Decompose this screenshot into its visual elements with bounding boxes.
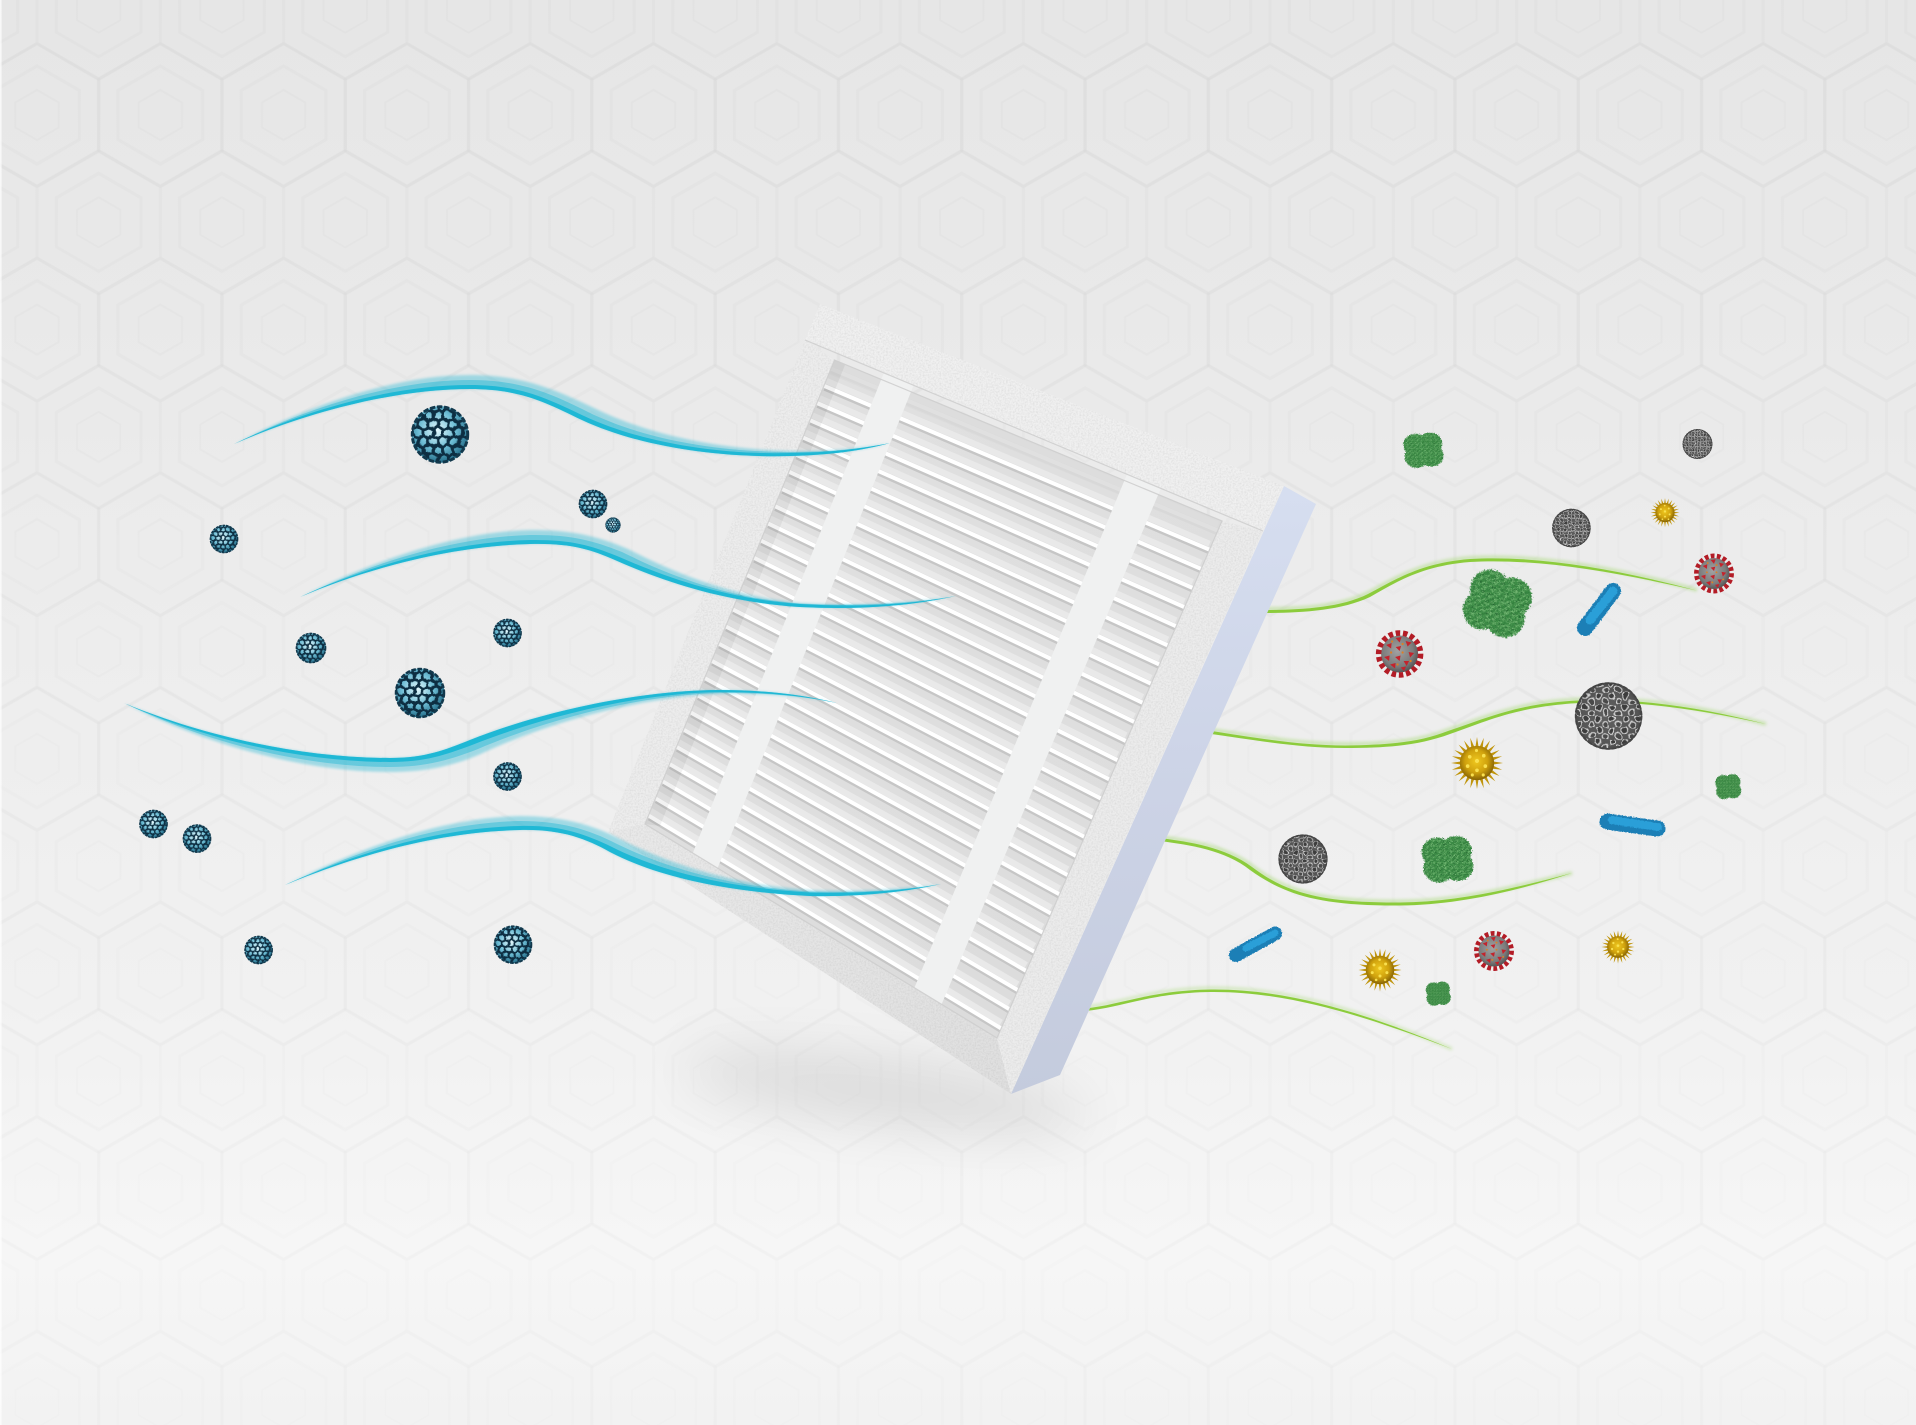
mold clump 1 (1403, 433, 1444, 468)
mold clump 2 large (1455, 561, 1540, 646)
air filter (600, 304, 1316, 1094)
frame bottom strip (608, 824, 1011, 1094)
molecule 1 large (412, 406, 468, 463)
dust ball 4 (1279, 835, 1327, 883)
blue stream 1 (234, 375, 890, 456)
bacterium rod 2 (1608, 820, 1658, 829)
mold clump 4 (1422, 836, 1473, 882)
virus 2 (1379, 633, 1421, 675)
support rib left (690, 370, 915, 872)
mold clump 5 small (1426, 982, 1451, 1006)
filter side edge (1011, 486, 1316, 1094)
virus 1 (1696, 556, 1732, 591)
contaminants (right) (1236, 429, 1741, 1006)
molecule 12 (494, 926, 532, 963)
pollen 2 (1451, 737, 1503, 789)
bacterium rod 1 (1585, 591, 1613, 628)
blue stream 3 (124, 690, 837, 772)
molecule 5 (296, 633, 326, 663)
pollen 3 (1601, 930, 1635, 964)
molecule 3 tiny (606, 518, 620, 532)
blue stream 2 (300, 530, 956, 608)
dust ball 3 large (1575, 682, 1642, 750)
molecule 11 (245, 936, 273, 964)
frame top strip (805, 304, 1284, 531)
mold clump 3 small (1715, 774, 1741, 799)
foam frame (608, 304, 1284, 1094)
frame left strip (608, 340, 834, 832)
molecule 8 (494, 763, 521, 790)
frame right strip (997, 521, 1263, 1094)
dust ball 2 (1552, 509, 1591, 547)
molecule 9 (140, 810, 167, 838)
molecule 2 (579, 490, 607, 518)
green stream 3 (1160, 837, 1572, 906)
bacterium rod 3 (1236, 933, 1275, 955)
dirty-side airflow: blue streams entering filter (124, 375, 956, 896)
virus 3 (1476, 933, 1512, 969)
floor shadow under filter (678, 1037, 1092, 1147)
pollen 4 (1358, 948, 1402, 992)
dust ball 1 (1683, 429, 1712, 459)
clean-side airflow: green streams leaving filter (1085, 557, 1766, 1049)
green stream 4 (1085, 988, 1452, 1049)
molecule 7 large (396, 669, 444, 717)
molecule 4 (210, 525, 238, 553)
frame seams (645, 340, 1263, 1038)
support rib right (911, 467, 1164, 1008)
pollen 1 (1650, 498, 1680, 527)
blue stream 4 (285, 816, 941, 896)
pleated filter media (646, 361, 1221, 1037)
green stream 2 (1205, 699, 1766, 748)
green stream 1 (1262, 557, 1697, 613)
molecule 10 (183, 825, 211, 853)
clean air molecules (left) (140, 406, 620, 964)
molecule 6 (494, 619, 521, 647)
